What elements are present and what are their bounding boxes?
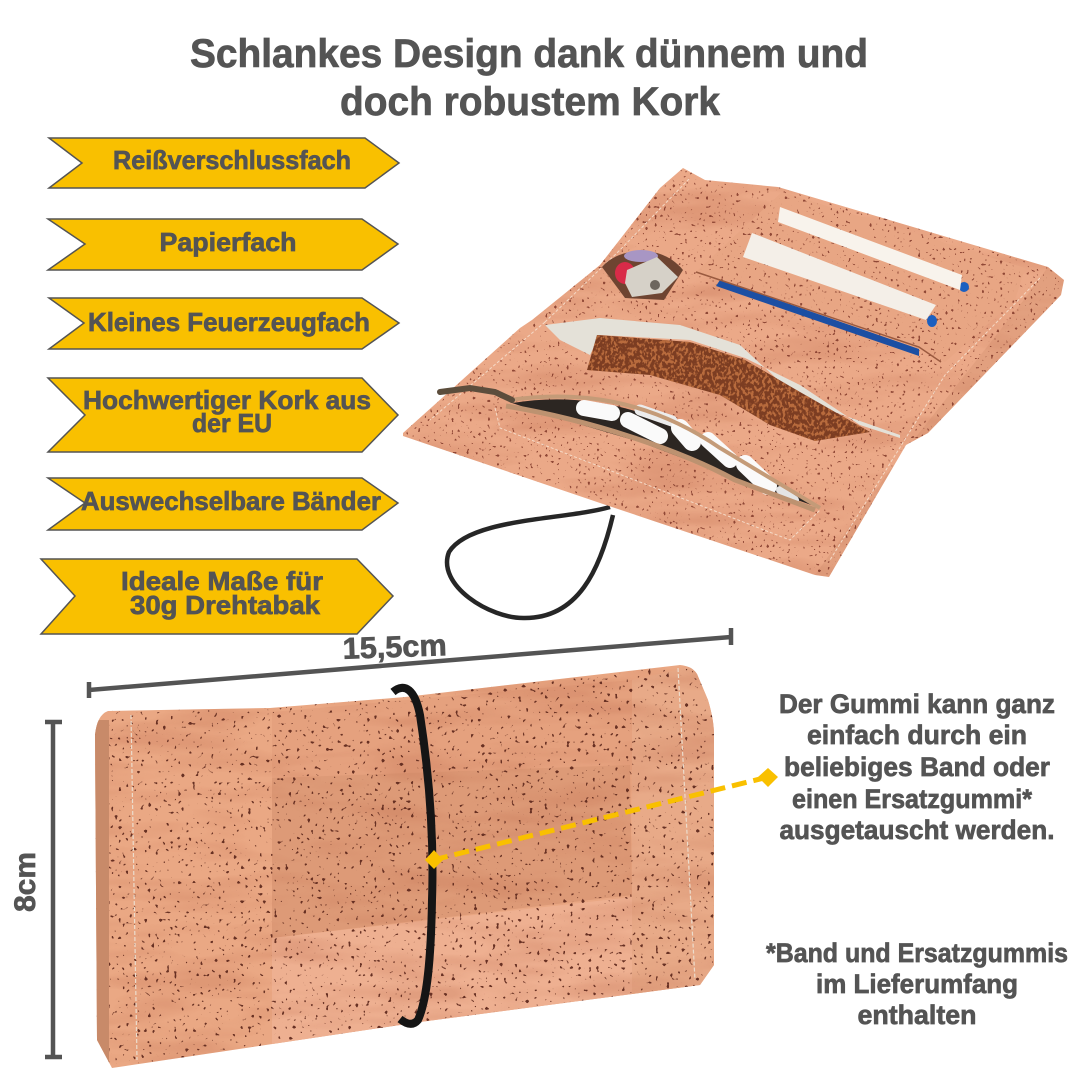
callout: elastic replacement: einen Ersatzgummi* [792,784,1032,814]
dimension: height 8cm: 8cm [9,852,42,912]
stitching [430,178,1040,560]
title: Schlankes Design dank dünnem und [190,32,868,76]
filter compartment [512,399,817,507]
footnote: included in delivery: im Lieferumfang [816,969,1018,999]
lighter [602,250,683,300]
feature arrow: Papierfach [48,219,398,270]
feature arrow: Ideale Maße für 30g Drehtabak: 30g Drehtabak [130,590,321,620]
feature arrow: Kleines Feuerzeugfach [49,298,399,349]
elastic band [393,688,432,1024]
callout: elastic replacement: ausgetauscht werden. [780,815,1054,845]
white paper strips [778,207,962,290]
dimension: width 15,5cm [89,628,731,698]
callout: elastic replacement: einfach durch ein [807,720,1027,750]
blue slot ends [959,282,969,292]
photo: open cork pouch [400,165,1070,618]
paper flap edge [696,272,941,362]
zipper [510,396,820,508]
feature arrow: Reißverschlussfach: Reißverschlussfach [113,145,351,175]
zipper pull [440,388,512,400]
feature arrow: Ideale Maße für 30g Drehtabak [41,559,393,634]
dimension: height 8cm [9,722,62,1057]
feature arrow: Auswechselbare Bänder: Auswechselbare Bänder [81,486,381,516]
dimension: width 15,5cm: 15,5cm [342,629,447,666]
feature arrow: Auswechselbare Bänder [48,478,398,530]
feature arrow: Hochwertiger Kork aus der EU: Hochwertiger Kork aus [83,385,371,415]
feature arrow: Ideale Maße für 30g Drehtabak: Ideale Maße für [121,566,323,596]
footnote: included in delivery [766,938,1068,1030]
callout: elastic replacement: beliebiges Band oder [784,752,1050,782]
feature arrow: Hochwertiger Kork aus der EU: der EU [192,408,272,438]
feature arrow: Hochwertiger Kork aus der EU [48,378,398,452]
title [190,32,868,124]
cork patches [272,680,632,780]
feature arrow: Kleines Feuerzeugfach: Kleines Feuerzeugfach [88,307,370,337]
callout: elastic replacement: Der Gummi kann ganz [779,689,1055,719]
cork body [400,165,1070,580]
callout: elastic replacement [779,689,1055,845]
cigarette filters [584,408,795,500]
feature arrow: Reißverschlussfach [49,138,399,188]
title: doch robustem Kork [340,80,721,124]
elastic loop [447,507,613,618]
footnote: included in delivery: enthalten [858,1000,976,1030]
pointer: dashed line from elastic to text [425,768,778,869]
stitching [131,668,695,1060]
grey pocket lining [545,318,900,438]
feature arrow: Papierfach: Papierfach [160,227,296,257]
tobacco [587,335,870,441]
blue rolling paper card [716,280,919,356]
photo: closed cork pouch [90,660,720,1072]
